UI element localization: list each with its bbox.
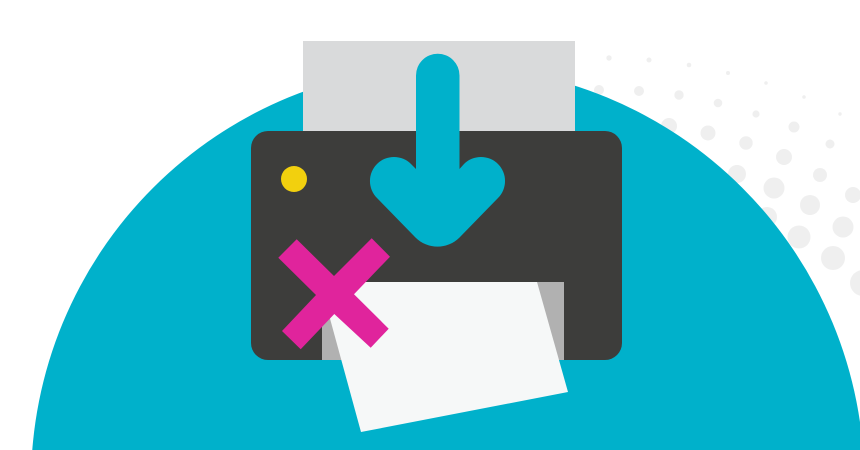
icon: error cross bbox=[278, 238, 390, 349]
printer body bbox=[251, 131, 622, 360]
jammed paper bbox=[320, 282, 568, 432]
halftone dot pattern bbox=[594, 55, 860, 296]
indicator light bbox=[281, 166, 307, 192]
icon: down arrow bbox=[370, 54, 505, 247]
paper entering printer bbox=[303, 41, 575, 133]
output slot bbox=[322, 282, 564, 360]
